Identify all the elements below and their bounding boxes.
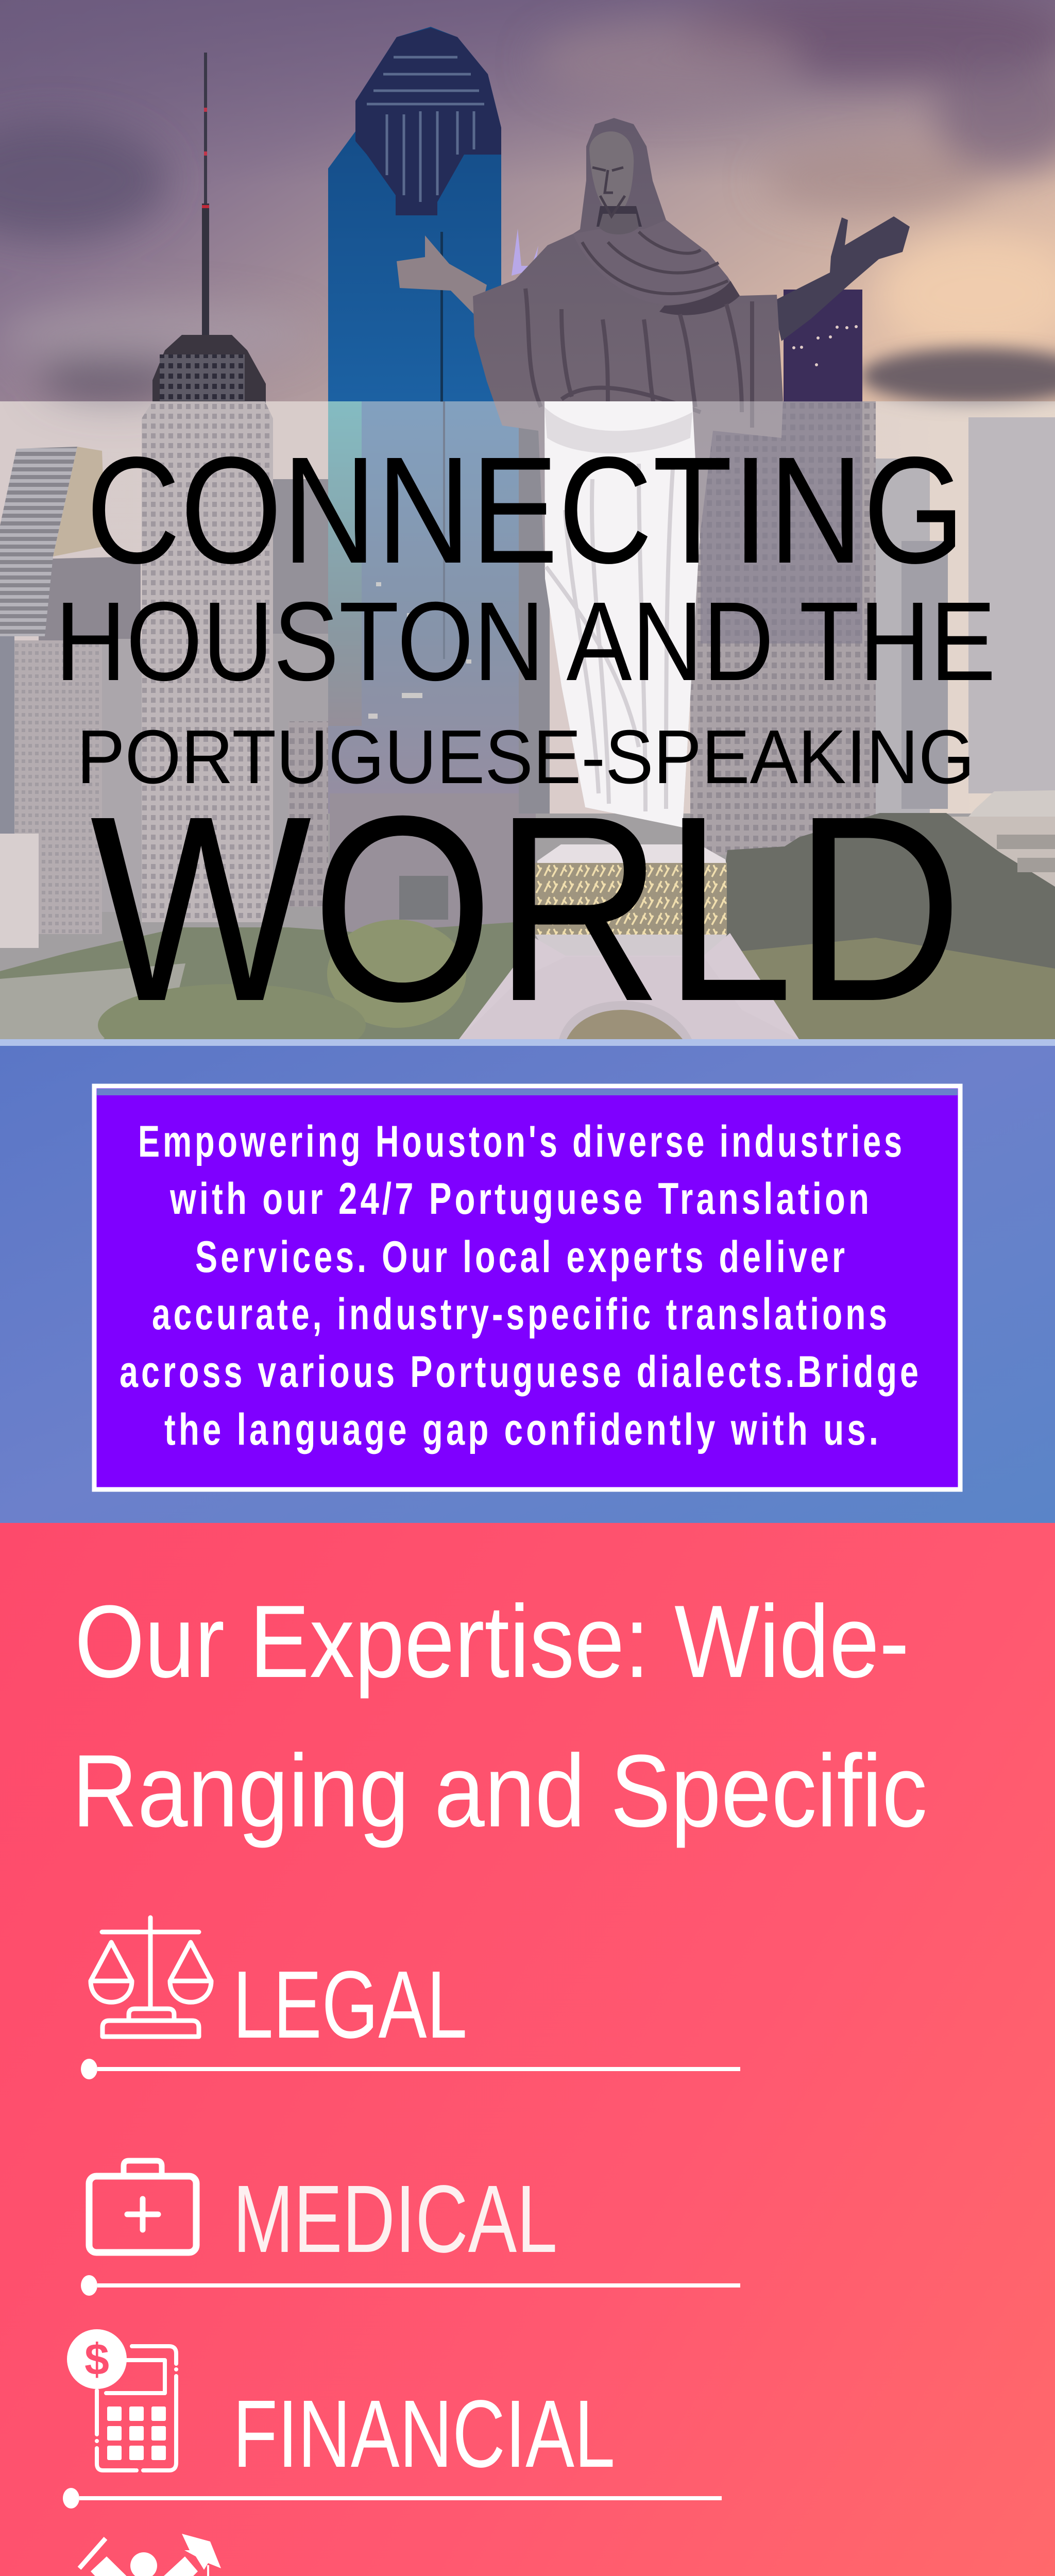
statue (397, 118, 910, 827)
item: financial: FINANCIAL (233, 2381, 615, 2487)
icon: calculator with dollar coin (67, 2329, 178, 2472)
icon: scales (91, 1918, 211, 2037)
panel: expertise section (0, 1523, 1055, 2576)
expertise heading (72, 1584, 927, 1849)
item: legal (81, 1918, 740, 2079)
statue cape (573, 220, 728, 304)
intro callout box (94, 1086, 960, 1489)
spire and left tower (204, 53, 207, 336)
buildings around blue tower (273, 479, 328, 634)
intro text (120, 1117, 922, 1454)
item: medical: MEDICAL (233, 2166, 557, 2273)
item: academic (76, 2534, 735, 2576)
blue tower (328, 27, 501, 412)
statue folds (525, 289, 752, 428)
title: WORLD (90, 761, 963, 1056)
clouds (0, 0, 1055, 403)
distant buildings left (39, 556, 141, 644)
expertise heading: Our Expertise: Wide- (75, 1584, 909, 1699)
item: medical (81, 2161, 740, 2296)
expertise heading: Ranging and Specific (72, 1734, 927, 1849)
pedestal (537, 844, 727, 866)
statue robe (473, 118, 783, 827)
photo overlay band (0, 401, 1055, 1039)
right pale building (951, 817, 1055, 887)
title (55, 425, 996, 1056)
statue right arm and hand (773, 216, 910, 341)
intro text: Services. Our local experts deliver (195, 1232, 848, 1282)
icon: calculator with dollar coin: $ (84, 2335, 109, 2384)
item: financial (63, 2329, 722, 2509)
icon: medical kit (89, 2161, 196, 2252)
statue lower robe (544, 401, 700, 827)
right dark purple tower (784, 290, 862, 402)
ground and trees (0, 922, 536, 1039)
statue face (589, 131, 634, 216)
panel: blue intro section (0, 1039, 1055, 1523)
panel: hero photo with skyline and statue (0, 0, 1055, 1066)
item: legal: LEGAL (233, 1952, 467, 2058)
buildings right of statue (519, 401, 550, 814)
title: PORTUGUESE-SPEAKING (77, 715, 975, 800)
icon: graduate (79, 2534, 221, 2576)
statue left arm and hand (397, 235, 487, 319)
